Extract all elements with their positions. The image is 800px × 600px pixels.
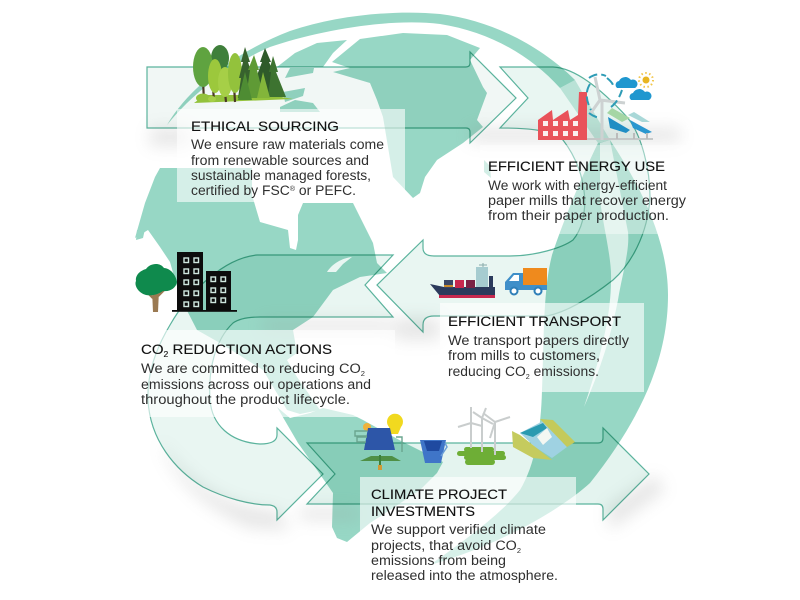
text: climate project investments: released into the atmosphere.: [371, 568, 558, 583]
text: ethical sourcing: ®: [290, 185, 296, 193]
text: efficient transport: 2: [526, 374, 530, 381]
text: climate project investments: We support verified climate: [371, 522, 546, 537]
text: efficient energy use: [488, 158, 686, 223]
text: CO2 reduction actions: CO: [141, 341, 162, 357]
text: CO2 reduction actions: [141, 341, 371, 407]
text: climate project investments: CLIMATE PROJECT: [371, 486, 507, 502]
text: ethical sourcing: ETHICAL SOURCING: [191, 118, 339, 134]
icon: solar panel and bulb: [355, 414, 403, 470]
text: ethical sourcing: certified by FSC: [191, 183, 287, 198]
text: climate project investments: 2: [517, 548, 521, 555]
text: CO2 reduction actions: emissions across our operations and: [141, 377, 371, 392]
icon: tree and buildings: [135, 252, 237, 312]
text: ethical sourcing: We ensure raw materials come: [191, 137, 384, 152]
text: efficient transport: We transport papers directly: [448, 333, 629, 348]
text: CO2 reduction actions: 2: [164, 350, 169, 359]
icon: water jug: [420, 440, 447, 463]
arrow: reduction: [148, 255, 393, 520]
land: Eurasia and Greenland: [277, 33, 491, 198]
icon: hydro dam: [512, 419, 575, 460]
text: efficient energy use: from their paper production.: [488, 208, 669, 223]
text: ethical sourcing: from renewable sources and: [191, 153, 369, 168]
text: efficient transport: [448, 313, 629, 381]
text: climate project investments: projects, that avoid CO: [371, 538, 508, 553]
white streak in ring: [584, 140, 628, 407]
text: CO2 reduction actions: throughout the product lifecycle.: [141, 392, 350, 407]
text: climate project investments: [371, 486, 558, 583]
arrow: climate: [307, 428, 649, 520]
text: efficient energy use: paper mills that recover energy: [488, 193, 686, 208]
text: efficient transport: reducing CO: [448, 364, 524, 379]
globe ring: [167, 13, 668, 565]
text: ethical sourcing: or PEFC.: [295, 183, 356, 198]
land: North and Central America: [135, 168, 387, 414]
text: climate project investments: INVESTMENTS: [371, 503, 475, 519]
text backing panels: [130, 109, 695, 569]
arrow shadows: [150, 128, 680, 530]
globe with continents: [135, 13, 668, 565]
text: CO2 reduction actions: We are committed to reducing CO: [141, 361, 345, 376]
land: South America: [277, 407, 443, 542]
text: efficient transport: from mills to customers,: [448, 348, 600, 363]
text: efficient energy use: EFFICIENT ENERGY USE: [488, 158, 665, 174]
text: efficient transport: EFFICIENT TRANSPORT: [448, 313, 621, 329]
gulf of St Lawrence: [327, 257, 352, 272]
text: CO2 reduction actions: REDUCTION ACTIONS: [168, 341, 332, 357]
text: CO2 reduction actions: 2: [361, 371, 365, 378]
icon: wind turbines: [457, 407, 510, 465]
icon: trees: [193, 45, 293, 103]
arrow: energy: [377, 67, 650, 332]
text: climate project investments: emissions from being: [371, 553, 506, 568]
text: efficient transport: emissions.: [530, 364, 599, 379]
text: efficient energy use: We work with energy-efficient: [488, 178, 667, 193]
icon: ship: [430, 263, 495, 298]
text: ethical sourcing: sustainable managed forests,: [191, 168, 371, 183]
arrow: sourcing: [147, 52, 516, 143]
icon: factory and renewables: [538, 73, 653, 140]
icon: truck: [505, 268, 547, 294]
text: ethical sourcing: [191, 118, 384, 198]
